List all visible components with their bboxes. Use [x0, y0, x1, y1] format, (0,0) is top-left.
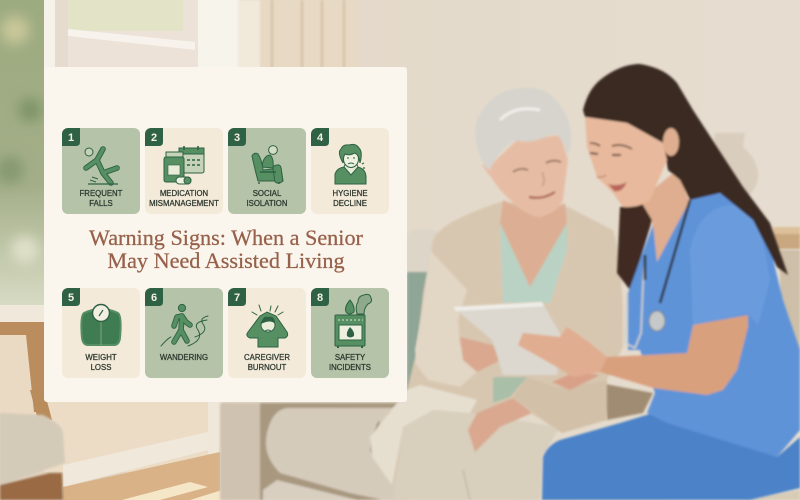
lower wall and baseboard [0, 335, 44, 415]
tile 2: medication mismanagement: 2 [151, 132, 157, 144]
senior woman [370, 87, 623, 500]
tile 3: social isolation: ISOLATION [246, 199, 288, 208]
tile 7: caregiver burnout: BURNOUT [248, 363, 287, 372]
curtain [238, 0, 358, 70]
tile 1: frequent falls: FREQUENT [80, 189, 123, 198]
hand [518, 327, 607, 377]
lower hair over shoulder [617, 203, 653, 290]
lower cardigan cuff [513, 377, 607, 433]
icon: pill bottle and calendar [164, 146, 204, 184]
icon: stove with flames and smoke [335, 294, 372, 348]
icon: bathroom scale [81, 304, 121, 345]
tile 2: medication mismanagement [145, 128, 223, 214]
facial features [590, 143, 632, 149]
icon: person falling [85, 148, 118, 184]
icon: unkempt person [335, 144, 366, 184]
neck and chest [500, 200, 567, 287]
sleeve [690, 205, 770, 325]
ear [663, 128, 679, 156]
tile 7: caregiver burnout: CAREGIVER [244, 353, 290, 362]
info card [44, 67, 407, 402]
tile 5: weight loss: WEIGHT [85, 353, 117, 362]
tile 8: safety incidents: 8 [317, 292, 323, 304]
tile 7: caregiver burnout [228, 288, 306, 378]
icon: stressed person holding head [247, 305, 288, 347]
tile 4: hygiene decline: HYGIENE [332, 189, 368, 198]
tile 3: social isolation [228, 128, 306, 214]
arm [590, 315, 748, 395]
tile 8: safety incidents [311, 288, 389, 378]
hand on knee [468, 398, 532, 452]
window [0, 0, 240, 323]
tile 1: frequent falls: FALLS [89, 199, 113, 208]
tile 2: medication mismanagement: MEDICATION [160, 189, 208, 198]
sofa [220, 230, 800, 500]
icon: person alone in armchair [252, 146, 283, 184]
tile 1: frequent falls: 1 [68, 132, 74, 144]
tile 5: weight loss: 5 [68, 292, 74, 304]
tile 6: wandering: WANDERING [160, 353, 208, 362]
tile 2: medication mismanagement: MISMANAGEMENT [149, 199, 219, 208]
tile 6: wandering [145, 288, 223, 378]
tile 8: safety incidents: SAFETY [335, 353, 366, 362]
tile 5: weight loss: LOSS [91, 363, 111, 372]
tile 3: social isolation: SOCIAL [253, 189, 282, 198]
tile 4: hygiene decline: DECLINE [333, 199, 367, 208]
side table [0, 322, 44, 412]
tablet [453, 302, 562, 375]
tile 4: hygiene decline [311, 128, 389, 214]
tile 8: safety incidents: INCIDENTS [329, 363, 371, 372]
card background [44, 67, 407, 402]
nurse [518, 64, 800, 500]
tile 1: frequent falls [62, 128, 140, 214]
cream flap [370, 385, 477, 485]
hair [583, 64, 788, 275]
scrub top [628, 193, 800, 457]
tile 6: wandering: 6 [151, 292, 157, 304]
icon: person walking on winding path [161, 304, 208, 346]
lower fingers [552, 372, 600, 390]
tile 3: social isolation: 3 [234, 132, 240, 144]
tile 7: caregiver burnout: 7 [234, 292, 240, 304]
hair [475, 87, 571, 170]
hand on tablet [460, 337, 513, 372]
armchair [0, 413, 65, 500]
facial features [513, 161, 561, 172]
scrub trousers [542, 413, 800, 500]
shelf and vase [714, 133, 800, 249]
face [585, 117, 667, 207]
title [89, 225, 364, 273]
sunlight on floor [122, 482, 222, 500]
title: May Need Assisted Living [107, 248, 345, 273]
floor [63, 452, 220, 500]
face [482, 135, 568, 217]
tile 4: hygiene decline: 4 [317, 132, 324, 144]
left sleeve [415, 250, 477, 387]
tile 5: weight loss [62, 288, 140, 378]
cardigan [370, 202, 623, 485]
title: Warning Signs: When a Senior [89, 225, 364, 250]
neck and chest [640, 170, 690, 262]
blouse [500, 222, 567, 303]
trousers [393, 410, 560, 500]
stethoscope [660, 200, 690, 303]
